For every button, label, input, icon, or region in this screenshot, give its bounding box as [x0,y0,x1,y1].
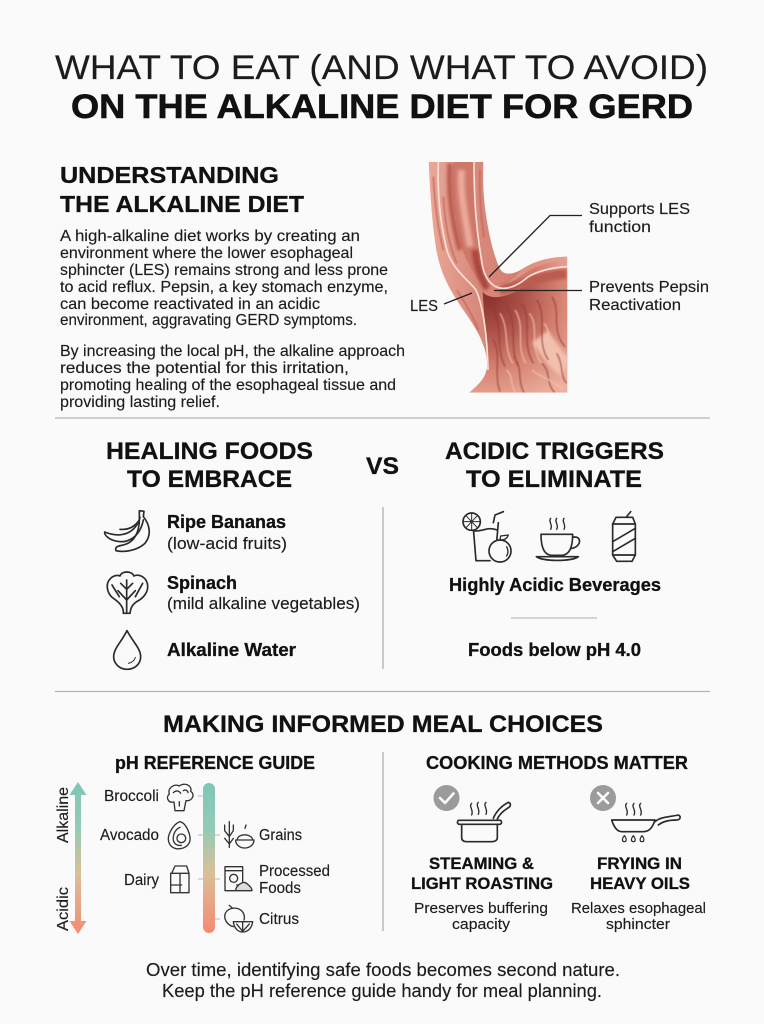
callout: Prevents Pepsin Reactivation: Prevents Pepsin [589,279,709,296]
heading: vs: VS [366,453,399,480]
method: frying in heavy oils: FRYING IN [597,854,682,873]
heading: healing foods to embrace: TO EMBRACE [127,466,292,493]
illustration: esophagus and stomach [427,160,570,397]
food item: spinach: (mild alkaline vegetables) [167,594,360,613]
method: frying in heavy oils: HEAVY OILS [590,874,690,893]
footer note: Keep the pH reference guide handy for meal planning. [162,981,602,1001]
text block: alkaline diet explanation: sphincter (LES) remains strong and less prone [60,262,388,279]
heading: acidic triggers to eliminate: ACIDIC TRIGGERS [445,438,664,465]
callout: Supports LES function: function [589,219,651,236]
heading: understanding the alkaline diet [60,162,304,217]
title [55,49,708,126]
icons: acidic beverages [463,512,635,562]
icon: water drop [114,631,141,669]
method: steaming and light roasting: STEAMING & [429,854,534,873]
heading: acidic triggers to eliminate: TO ELIMINATE [466,466,642,493]
text block: alkaline diet explanation: A high-alkaline diet works by creating an [60,228,360,245]
text: highly acidic beverages: Highly Acidic Beverages [449,575,661,595]
heading: understanding the alkaline diet: THE ALKALINE DIET [60,191,304,217]
food item: alkaline water [114,631,296,669]
food item: spinach [107,572,360,613]
icon: grains and rice bowl [225,822,254,848]
callout: Supports LES function [489,201,690,277]
food item: ripe bananas: Ripe Bananas [167,512,286,532]
icon: processed food bag [225,867,252,891]
icon: soda can [613,512,635,561]
callout: Prevents Pepsin Reactivation: Reactivation [589,297,681,314]
callout: Prevents Pepsin Reactivation [494,279,709,314]
labels and icons, left side [100,784,193,893]
text block: alkaline diet explanation: By increasing the local pH, the alkaline approach [60,343,405,360]
icon: avocado [168,822,190,849]
heading: pH reference guide: pH REFERENCE GUIDE [115,753,315,773]
text block: alkaline diet explanation: can become reactivated in an acidic [60,296,320,313]
icon: steaming pot [457,802,510,842]
heading: making informed meal choices: MAKING INFORMED MEAL CHOICES [163,711,603,738]
text: foods below pH 4.0: Foods below pH 4.0 [468,640,641,660]
axis arrow: alkaline to acidic: Acidic [55,887,72,931]
food item: ripe bananas: (low-acid fruits) [167,534,287,553]
labels and icons, left side: Dairy [124,872,159,889]
method: frying in heavy oils: Relaxes esophageal [571,900,706,917]
text block: alkaline diet explanation: reduces the potential for this irritation, [60,360,349,377]
method: frying in heavy oils: sphincter [606,916,670,933]
icon: spinach [107,572,148,613]
method: steaming and light roasting: LIGHT ROASTING [411,874,553,893]
footer note [146,960,620,1001]
icon: milk carton [171,866,189,893]
text block: alkaline diet explanation: environment, aggravating GERD symptoms. [60,312,357,329]
method: steaming and light roasting: capacity [452,916,511,933]
text block: alkaline diet explanation [60,228,405,411]
method: steaming and light roasting: Preserves buffering [414,900,548,917]
title: ON THE ALKALINE DIET FOR GERD [71,88,693,126]
chart: pH reference guide [55,782,330,934]
icon: coffee cup [536,518,580,560]
labels and icons, right side: Citrus [259,911,299,928]
footer note: Over time, identifying safe foods becomes second nature. [146,960,620,980]
icon: bananas [105,511,149,551]
heading: healing foods to embrace: HEALING FOODS [106,438,313,465]
heading: healing foods to embrace [106,438,313,493]
callout: LES [410,293,472,315]
axis arrow: alkaline to acidic [55,782,86,934]
labels and icons, left side: Broccoli [104,788,159,805]
axis arrow: alkaline to acidic: Alkaline [55,787,72,843]
method: steaming and light roasting [411,785,553,933]
title: WHAT TO EAT (AND WHAT TO AVOID) [55,49,708,87]
icon: broccoli [168,784,193,811]
icon: x badge [590,785,616,811]
labels and icons, right side: Processed [259,863,330,880]
text block: alkaline diet explanation: environment where the lower esophageal [60,245,353,262]
heading: acidic triggers to eliminate [445,438,664,493]
method: frying in heavy oils [571,785,706,933]
icon: frying pan [612,803,680,842]
icon: citrus [225,905,253,932]
text block: alkaline diet explanation: promoting healing of the esophageal tissue and [60,377,396,394]
labels and icons, right side: Grains [259,827,302,844]
labels and icons, right side: Foods [259,880,301,897]
icon: check badge [434,785,460,811]
labels and icons, left side: Avocado [100,827,159,844]
food item: alkaline water: Alkaline Water [167,640,296,660]
labels and icons, right side [225,822,330,932]
text block: alkaline diet explanation: providing lasting relief. [60,394,220,411]
text block: alkaline diet explanation: to acid reflux. Pepsin, a key stomach enzyme, [60,279,388,296]
food item: spinach: Spinach [167,573,237,593]
icon: juice glass with orange [463,512,511,562]
callout: Supports LES function: Supports LES [589,201,690,218]
pH gradient bar [203,783,215,933]
heading: cooking methods matter: COOKING METHODS MATTER [426,753,688,773]
callout: LES: LES [410,298,438,315]
food item: ripe bananas [105,511,287,553]
heading: understanding the alkaline diet: UNDERSTANDING [60,162,279,188]
